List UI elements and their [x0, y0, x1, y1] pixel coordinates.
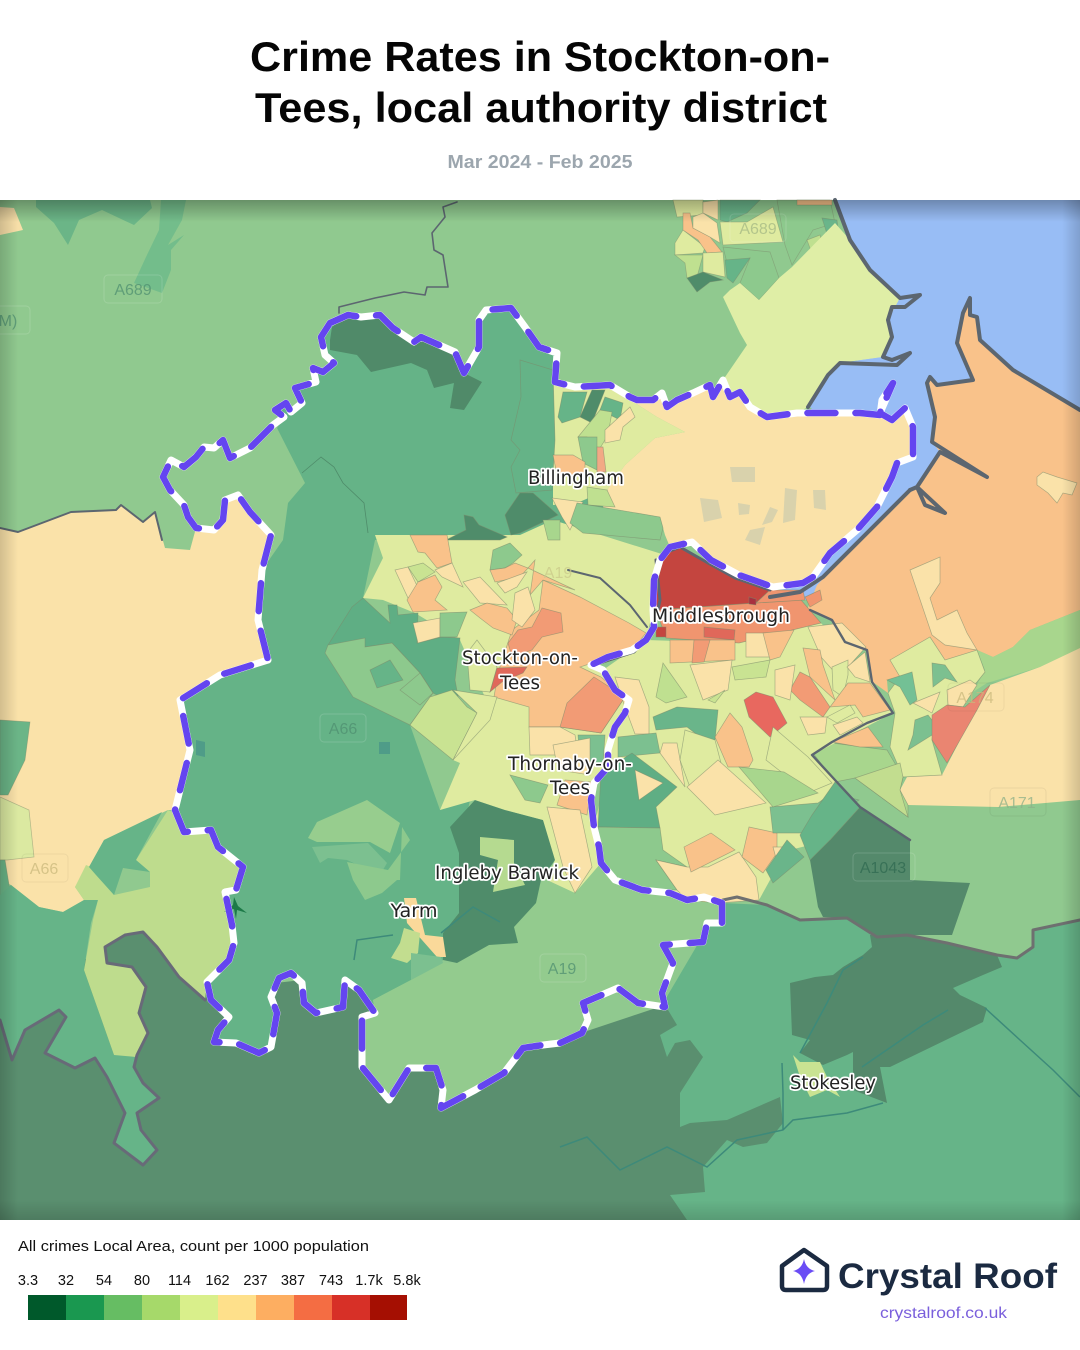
- logo: Crystal Roof: [782, 1250, 1057, 1322]
- region: far-west wards: [0, 720, 34, 900]
- region: west peach district: [0, 495, 271, 912]
- subtitle: date range: Mar 2024 - Feb 2025: [448, 152, 632, 172]
- region: north-west corner wards: [0, 200, 186, 293]
- title: [250, 33, 830, 131]
- road labels: A19: [544, 565, 572, 582]
- legend value labels: 32: [58, 1273, 74, 1289]
- website url: crystalroof.co.uk: [880, 1305, 1008, 1322]
- region: Billingham east industrial peach: [577, 380, 913, 587]
- place labels: Stockton-on-: [462, 648, 578, 669]
- place labels: Stokesley: [790, 1073, 876, 1094]
- place labels: Thornaby-on-: [507, 754, 632, 775]
- legend value labels: 237: [243, 1273, 268, 1289]
- region: south-east rural: [600, 903, 1080, 1220]
- map edge shadow: [0, 200, 1080, 1220]
- map base land: [0, 200, 1080, 1220]
- title: Tees, local authority district: [255, 84, 827, 131]
- legend value labels: 387: [281, 1273, 305, 1289]
- place labels: Middlesbrough: [652, 606, 790, 627]
- region: south-west wards: [0, 810, 243, 1165]
- region: Stockton urban wards: [325, 360, 685, 893]
- logo wordmark: Crystal Roof: [838, 1257, 1057, 1296]
- region: north coast pale wards: [723, 223, 900, 417]
- road labels: A66: [329, 721, 357, 738]
- region: Teesmouth industrial east: [807, 298, 1080, 693]
- icon: house with star: [782, 1250, 827, 1290]
- region: Stockton-on-Tees rural green: [175, 308, 630, 1053]
- icon: airport plane: [224, 897, 247, 919]
- road labels: A66: [30, 861, 58, 878]
- road labels: A174: [956, 690, 994, 707]
- sea: [790, 200, 1080, 600]
- rivers: [354, 907, 1080, 1170]
- road labels: A171: [998, 795, 1036, 812]
- legend title: All crimes Local Area, count per 1000 population: [18, 1239, 369, 1255]
- place labels: Billingham: [528, 468, 624, 489]
- legend value labels: 3.3: [18, 1273, 38, 1289]
- legend value labels: 54: [96, 1273, 112, 1289]
- legend value labels: 743: [319, 1273, 343, 1289]
- legend value labels: 80: [134, 1273, 150, 1289]
- industrial patches: [700, 467, 826, 545]
- legend colour scale: [28, 1295, 407, 1320]
- legend value labels: 114: [168, 1273, 191, 1289]
- place labels: Tees: [549, 778, 590, 799]
- place labels: [389, 468, 876, 1094]
- place labels: Tees: [499, 673, 540, 694]
- Stockton-on-Tees district boundary: [163, 308, 913, 1108]
- legend value labels: 5.8k: [393, 1273, 421, 1289]
- region: North York Moors dark band: [0, 925, 783, 1220]
- legend: [18, 1239, 421, 1320]
- region: east dark wards: [790, 800, 1080, 1103]
- road labels: A1043: [860, 860, 906, 877]
- road labels: [0, 214, 1046, 982]
- region: Middlesbrough urban wards: [594, 547, 893, 903]
- road labels: A19: [548, 961, 576, 978]
- legend value labels: 1.7k: [355, 1273, 383, 1289]
- place labels: Yarm: [389, 901, 438, 922]
- region: north-east tile wards: [673, 200, 840, 300]
- sea water in estuary: [780, 298, 940, 592]
- region: east-side wards: [813, 472, 1080, 817]
- region: south rural wards: [308, 800, 722, 1108]
- administrative boundary lines: [0, 200, 1080, 1165]
- road labels: A689: [739, 221, 777, 238]
- road labels: A689: [114, 282, 152, 299]
- legend value labels: [18, 1273, 421, 1289]
- title: Crime Rates in Stockton-on-: [250, 33, 830, 80]
- place labels: Ingleby Barwick: [435, 863, 579, 884]
- legend value labels: 162: [205, 1273, 230, 1289]
- choropleth map: [0, 200, 1080, 1220]
